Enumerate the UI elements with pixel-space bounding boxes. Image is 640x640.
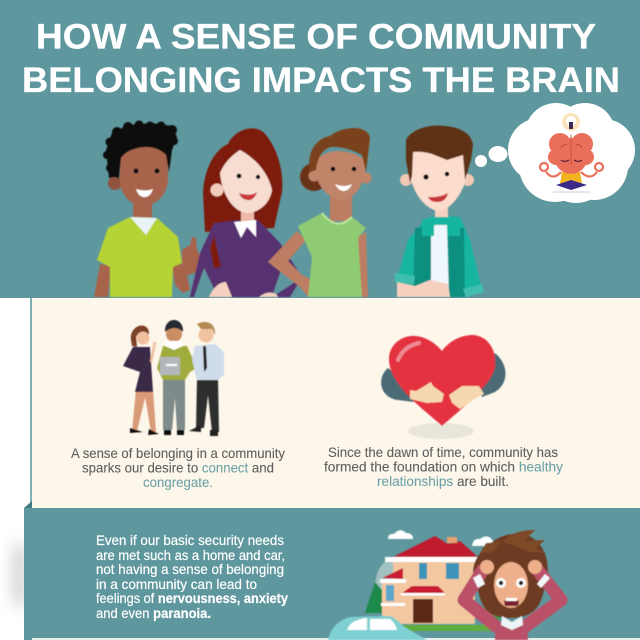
illustration: four friends: [94, 120, 484, 297]
title: [22, 18, 620, 100]
text: lack of belonging: Even if our basic security needs: [96, 532, 284, 548]
text: community foundation: Since the dawn of time, community has: [328, 444, 558, 460]
icon: heart being hugged: [381, 335, 506, 439]
woman: [132, 390, 156, 432]
text: lack of belonging: feelings of nervousness, anxiety: [96, 590, 288, 606]
text: lack of belonging: [96, 532, 288, 621]
text: community foundation: relationships are built.: [377, 473, 509, 489]
text: belonging sparks connection: sparks our desire to connect and: [82, 460, 274, 476]
man with laptop: [163, 380, 185, 430]
worried woman: [464, 530, 561, 640]
text: community foundation: formed the foundation on which healthy: [324, 458, 563, 474]
soft shadow left of lower band: [14, 545, 26, 605]
title: HOW A SENSE OF COMMUNITY: [36, 18, 596, 56]
header band: [0, 0, 640, 298]
man in tie: [196, 379, 219, 432]
text: lack of belonging: not having a sense of belonging: [96, 561, 284, 577]
person 1: [94, 120, 200, 297]
text: lack of belonging: and even paranoia.: [96, 605, 211, 621]
person 4: [395, 126, 484, 297]
car: [328, 616, 427, 640]
brain character: [540, 113, 603, 192]
text: belonging sparks connection: congregate.: [143, 474, 213, 490]
title: BELONGING IMPACTS THE BRAIN: [22, 61, 620, 100]
illustration: three colleagues talking: [123, 320, 224, 436]
person 3: [268, 128, 372, 297]
text: lack of belonging: in a community can lead to: [96, 576, 257, 592]
lower teal band: [24, 501, 640, 640]
text: belonging sparks connection: A sense of belonging in a community: [71, 445, 285, 461]
illustration: house, car and worried woman: [328, 530, 561, 640]
text: belonging sparks connection: [71, 445, 285, 490]
house: [375, 558, 405, 590]
thought bubble with meditating brain: [475, 103, 635, 203]
text: lack of belonging: are met such as a home and car,: [96, 547, 285, 563]
cream panel: [30, 298, 640, 508]
person 2: [190, 128, 302, 297]
text: community foundation: [324, 444, 563, 489]
clouds: [388, 530, 413, 539]
